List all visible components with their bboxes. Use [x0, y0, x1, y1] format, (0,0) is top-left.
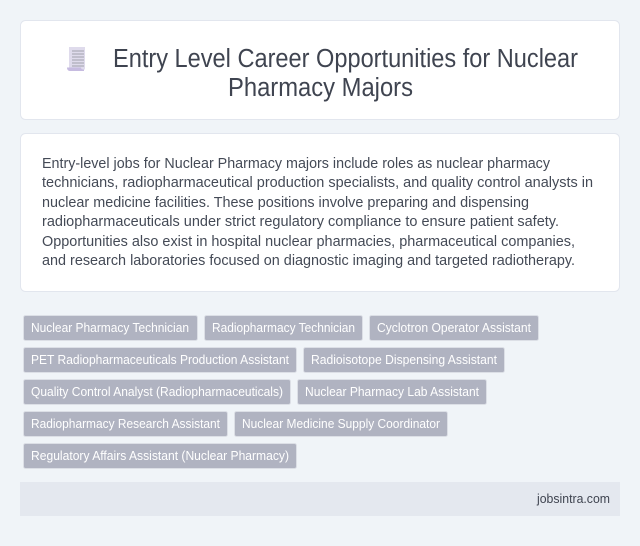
tag: Nuclear Pharmacy Technician: Nuclear Pharmacy Technician	[31, 321, 189, 335]
panel: description	[20, 134, 620, 292]
tag: PET Radiopharmaceuticals Production Assistant: PET Radiopharmaceuticals Production Assistant	[31, 353, 290, 367]
tag: Cyclotron Operator Assistant	[370, 316, 538, 340]
tag: Radiopharmacy Technician: Radiopharmacy Technician	[212, 321, 355, 335]
tag: PET Radiopharmaceuticals Production Assistant	[24, 348, 296, 372]
tag: Radioisotope Dispensing Assistant: Radioisotope Dispensing Assistant	[311, 353, 498, 367]
panel: description: Entry-level jobs for Nuclear Pharmacy majors include roles as nuclear pharmacy	[42, 156, 551, 172]
panel: description: and research laboratories focused on diagnostic imaging and targeted radiotherapy.	[42, 253, 575, 269]
tag: Nuclear Pharmacy Lab Assistant	[298, 380, 486, 404]
panel: description: radiopharmaceuticals under strict regulatory compliance to ensure patient safety.	[42, 214, 559, 230]
icon: document scroll	[67, 47, 85, 71]
tag: Regulatory Affairs Assistant	[24, 444, 296, 468]
tag: Quality Control Analyst: Quality Control Analyst (Radiopharmaceuticals)	[31, 385, 283, 399]
footer: jobsintra.com	[536, 492, 610, 506]
tag: Nuclear Medicine Supply Coordinator	[234, 412, 448, 436]
tag list	[24, 316, 538, 468]
tag: Radioisotope Dispensing Assistant	[304, 348, 504, 372]
tag: Nuclear Pharmacy Lab Assistant: Nuclear Pharmacy Lab Assistant	[305, 385, 480, 399]
panel: description: Opportunities also exist in hospital nuclear pharmacies, pharmaceutical companies,	[42, 234, 575, 250]
title: Entry Level Career Opportunities for Nuclear	[113, 45, 578, 73]
tag: Radiopharmacy Research Assistant: Radiopharmacy Research Assistant	[31, 417, 220, 431]
footer	[20, 482, 620, 516]
tag: Nuclear Medicine Supply Coordinator: Nuclear Medicine Supply Coordinator	[242, 417, 440, 431]
panel: description: nuclear medicine facilities. These positions involve preparing and dispensing	[42, 195, 529, 211]
tag: Regulatory Affairs Assistant: Regulatory Affairs Assistant (Nuclear Pharmacy)	[31, 449, 289, 463]
tag: Quality Control Analyst	[24, 380, 290, 404]
tag: Radiopharmacy Technician	[204, 316, 362, 340]
panel: description: technicians, radiopharmaceutical production specialists, and quality control analysts in	[42, 175, 593, 191]
title	[113, 45, 578, 102]
tag: Radiopharmacy Research Assistant	[24, 412, 228, 436]
panel: header card	[20, 20, 620, 120]
title: Pharmacy Majors	[228, 74, 413, 102]
tag: Cyclotron Operator Assistant: Cyclotron Operator Assistant	[377, 321, 531, 335]
tag: Nuclear Pharmacy Technician	[24, 316, 198, 340]
